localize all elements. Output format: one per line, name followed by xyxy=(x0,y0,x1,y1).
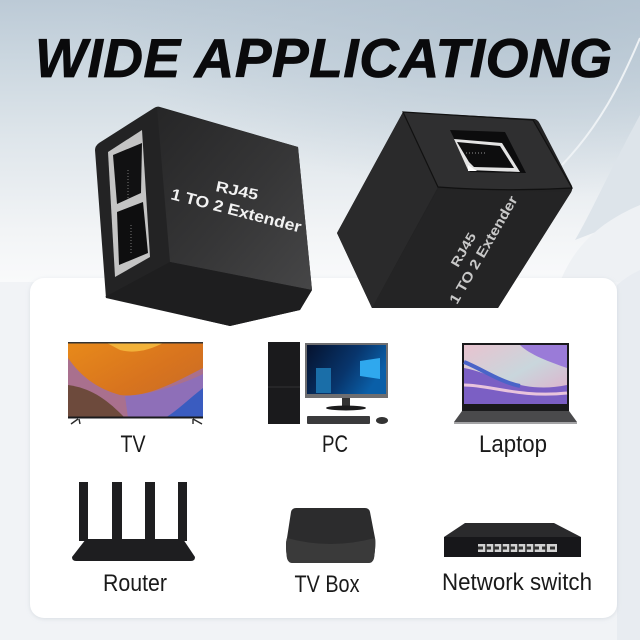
Network switch label: Network switch xyxy=(442,569,592,596)
TV label: TV xyxy=(120,431,146,458)
right adapter label: 1 TO 2 Extender xyxy=(446,192,521,306)
TV Box image xyxy=(286,508,375,563)
left adapter label: 1 TO 2 Extender xyxy=(169,186,303,236)
device: Laptop xyxy=(454,343,577,458)
Network switch image xyxy=(444,523,581,557)
right adapter body xyxy=(337,112,572,308)
Laptop label: Laptop xyxy=(479,431,547,458)
panel: applications xyxy=(30,278,617,618)
PC image xyxy=(268,342,388,424)
device: Router xyxy=(72,482,195,597)
device: PC xyxy=(268,342,388,458)
left adapter: RJ45 1 to 2 extender xyxy=(95,107,312,326)
right adapter label: RJ45 xyxy=(448,230,479,270)
right adapter port xyxy=(450,130,526,173)
Router label: Router xyxy=(103,570,167,597)
left adapter dual ports xyxy=(108,130,150,277)
left adapter label: RJ45 xyxy=(214,178,260,204)
device: Network switch xyxy=(442,523,592,596)
device: TV xyxy=(68,342,203,458)
title: WIDE APPLICATIONG xyxy=(35,27,612,89)
right adapter: RJ45 1 to 2 extender xyxy=(337,112,572,308)
Laptop image xyxy=(454,343,577,424)
left adapter body xyxy=(95,107,312,326)
Router image xyxy=(72,482,195,561)
PC label: PC xyxy=(322,431,348,458)
device: TV Box xyxy=(286,508,375,598)
TV image xyxy=(68,342,203,424)
TV Box label: TV Box xyxy=(294,571,360,598)
